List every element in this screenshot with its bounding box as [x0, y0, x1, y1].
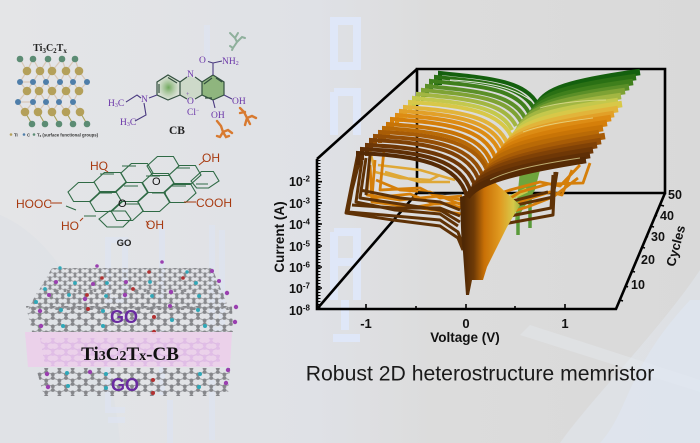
CB molecule: O	[199, 56, 206, 66]
MXene lattice	[15, 56, 90, 127]
GO molecule: OH	[202, 151, 220, 165]
GO molecule: O	[118, 198, 127, 210]
y axis title: Current (A)	[272, 201, 287, 273]
chart back frame	[317, 69, 665, 309]
GO molecule: COOH	[196, 196, 232, 210]
CB molecule: N	[141, 95, 148, 105]
GO label lower: GO	[111, 375, 139, 395]
MXene legend: Tₓ (surface functional groups)	[37, 132, 99, 138]
GO molecule: O	[152, 176, 161, 188]
low-state current traces	[346, 150, 590, 250]
Ti3C2Tx-CB band	[25, 332, 232, 367]
CB molecule: C	[130, 118, 136, 128]
MXene legend: C	[27, 132, 30, 138]
x axis tick labels: 0	[462, 316, 470, 331]
cycles tick labels: 40	[660, 209, 674, 223]
y axis tick labels: 10	[289, 304, 303, 318]
band label: Ti3C2Tx-CB	[81, 344, 179, 365]
cycles tick labels: 50	[668, 188, 682, 202]
MXene legend	[10, 132, 99, 138]
GO molecule: HO	[61, 219, 79, 233]
y axis tick labels: 10	[289, 197, 303, 211]
upper GO sheet	[26, 260, 238, 334]
central wedge	[460, 178, 520, 295]
chart axes	[317, 159, 665, 309]
title MXene: 3	[42, 47, 46, 55]
title MXene: T	[57, 43, 64, 54]
GO label: GO	[117, 238, 131, 249]
title MXene: C	[46, 43, 53, 54]
CB molecule: OH	[211, 111, 225, 121]
CB molecule: OH	[232, 97, 246, 107]
y axis tick labels: -6	[303, 260, 311, 270]
y axis tick labels	[289, 174, 311, 318]
GO label upper: GO	[110, 307, 138, 327]
x axis tick labels: 1	[561, 316, 569, 331]
cycles tick labels: 30	[651, 230, 665, 244]
x axis title: Voltage (V)	[430, 330, 500, 345]
y axis tick labels: -3	[303, 196, 311, 206]
y axis tick labels: 10	[289, 175, 303, 189]
y axis tick labels: 10	[289, 261, 303, 275]
y axis tick labels: 10	[289, 240, 303, 254]
CB molecule: NH	[222, 57, 236, 67]
icon: orange bacterium right	[240, 108, 256, 125]
CB molecule	[108, 56, 246, 128]
cycles tick labels: 10	[631, 278, 645, 292]
icon: gray-green bacterium	[230, 33, 245, 50]
CB molecule: −	[196, 108, 200, 114]
CB label: CB	[169, 125, 185, 137]
y axis tick labels: -5	[303, 240, 311, 248]
y axis tick labels: -7	[303, 282, 311, 290]
CB molecule: 3	[127, 122, 130, 128]
3D chart	[272, 69, 688, 345]
heterostructure stack	[25, 260, 238, 396]
CB molecule: +	[186, 92, 190, 98]
CB molecule: Cl	[187, 108, 196, 118]
CB molecule: H	[120, 118, 127, 128]
title MXene: Ti	[33, 43, 42, 54]
y axis tick labels: 10	[289, 282, 303, 296]
x axis tick labels: -1	[360, 316, 372, 331]
lower GO sheet	[36, 368, 230, 396]
CB molecule: O	[187, 97, 194, 107]
cycles title: Cycles	[663, 224, 688, 268]
CB molecule: 2	[236, 61, 239, 67]
CB molecule: N	[187, 70, 194, 80]
CB molecule: 3	[115, 103, 118, 109]
caption: Robust 2D heterostructure memristor	[306, 362, 654, 386]
y axis tick labels: 10	[289, 218, 303, 232]
GO molecule: HOOC	[16, 197, 52, 211]
cycles tick labels: 20	[641, 253, 655, 267]
right wing highlights	[490, 100, 606, 180]
left wing gaps highlight	[450, 80, 533, 102]
title MXene: x	[63, 47, 67, 55]
cycles tick labels	[631, 188, 682, 292]
GO molecule	[16, 151, 232, 233]
icon: orange bacterium	[217, 121, 232, 137]
y axis tick labels: -2	[303, 174, 311, 184]
CB molecule: H	[108, 99, 115, 109]
GO molecule: HO	[90, 159, 108, 173]
CB molecule: C	[118, 99, 124, 109]
MXene legend: Ti	[14, 132, 18, 138]
y axis tick labels: -8	[303, 304, 311, 312]
right wing surface	[467, 72, 640, 197]
title MXene: 2	[53, 47, 57, 55]
x axis tick labels	[360, 316, 569, 331]
y axis tick labels: -4	[303, 218, 311, 226]
GO molecule: OH	[146, 218, 164, 232]
left wing curves	[358, 73, 538, 197]
